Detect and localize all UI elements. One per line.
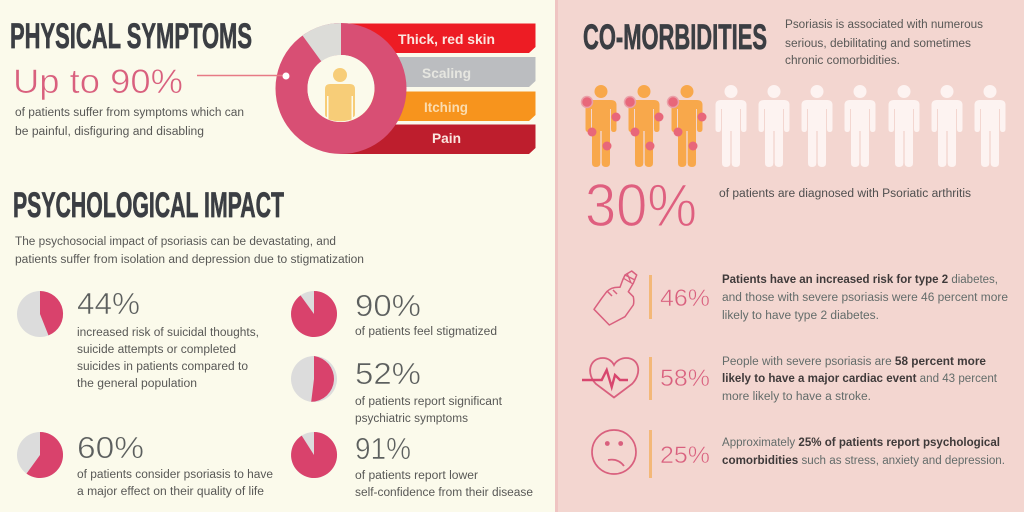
divider (649, 275, 652, 319)
stat: up to 90%: Up to 90% (13, 63, 183, 101)
icon: heart with pulse (582, 358, 638, 398)
text: psychosocial intro: The psychosocial impact of psoriasis can be devastating, and (15, 236, 336, 248)
pie: 44% (17, 291, 63, 337)
stat: 60%: a major effect on their quality of life (77, 486, 264, 498)
stat: 60% (17, 430, 273, 498)
text: diabetes: Patients have an increased risk for type 2 diabetes, (722, 274, 998, 286)
text: psychosocial intro (15, 236, 364, 266)
icon: finger prick (594, 271, 637, 325)
divider (649, 430, 652, 478)
stat: 44%: increased risk of suicidal thoughts, (77, 327, 259, 339)
pie: 90% (291, 291, 337, 337)
banner: scaling: Scaling (422, 65, 471, 81)
text: psychological: Approximately 25% of patients report psychological (722, 437, 1000, 449)
text: diabetes: and those with severe psoriasis were 46 percent more (722, 292, 1008, 304)
text: cardiac: more likely to have a stroke. (722, 391, 871, 403)
banner: scaling (341, 57, 536, 87)
stat: 52%: 52% (355, 356, 421, 391)
stat: 91%: 91% (355, 431, 411, 466)
symptom banners (341, 24, 536, 154)
text: cardiac: likely to have a major cardiac event and 43 percent (722, 373, 998, 385)
text: psoriatic arthritis: of patients are diagnosed with Psoriatic arthritis (719, 188, 971, 200)
heading: psychological impact: PSYCHOLOGICAL IMPACT (13, 186, 284, 225)
stat: 44% (17, 286, 259, 390)
panel: background right (555, 0, 1024, 512)
stat: 90% (291, 288, 497, 338)
text: psychosocial intro: patients suffer from isolation and depression due to stigmatization (15, 254, 364, 266)
icon: person in donut (325, 68, 355, 121)
heading: physical symptoms: PHYSICAL SYMPTOMS (10, 17, 252, 56)
text: comorbidities intro (785, 19, 983, 67)
stat: 90%: of patients feel stigmatized (355, 326, 497, 338)
connector dot (282, 72, 290, 80)
stat: 91% (291, 431, 533, 499)
banner: pain: Pain (432, 130, 461, 146)
stat: 30%: 30% (585, 172, 697, 239)
text: comorbidities intro: chronic comorbidities. (785, 55, 900, 67)
stat: 91%: self-confidence from their disease (355, 487, 533, 499)
pie: 52% (291, 356, 337, 402)
stat: 44%: suicide attempts or completed (77, 344, 236, 356)
banner: thick red skin (341, 24, 536, 53)
banner: thick red skin: Thick, red skin (398, 31, 495, 47)
panel: background left (0, 0, 555, 512)
stat: 58%: 58% (660, 365, 710, 392)
row: cardiac (582, 356, 998, 403)
divider (649, 357, 652, 400)
pie: 60% (17, 432, 63, 478)
text: comorbidities intro: serious, debilitating and sometimes (785, 38, 971, 50)
stat: 52% (291, 356, 503, 425)
stat: 52%: psychiatric symptoms (355, 413, 468, 425)
heading: co-morbidities: CO-MORBIDITIES (583, 18, 767, 57)
text: cardiac: People with severe psoriasis are 58 percent more (722, 356, 986, 368)
stat: 60%: 60% (77, 430, 144, 465)
stat: 90%: 90% (355, 288, 421, 323)
stat: 60%: of patients consider psoriasis to have (77, 469, 273, 481)
text: cardiac (722, 356, 998, 403)
icon: sad face (592, 430, 636, 474)
stat: 44%: 44% (77, 286, 140, 321)
row: diabetes (594, 271, 1008, 325)
text: psychological: comorbidities such as stress, anxiety and depression. (722, 455, 1005, 467)
stat: 46%: 46% (660, 285, 710, 312)
text: diabetes (722, 274, 1008, 322)
chart: donut 90% (292, 23, 390, 138)
text: symptoms description: be painful, disfiguring and disabling (15, 126, 204, 138)
stat: 44%: suicides in patients compared to (77, 361, 248, 373)
stat: 25%: 25% (660, 442, 710, 469)
row: psychological (592, 430, 1005, 478)
text: comorbidities intro: Psoriasis is associated with numerous (785, 19, 983, 31)
text: diabetes: likely to have type 2 diabetes. (722, 310, 879, 322)
connector line (197, 74, 285, 76)
banner: pain (341, 124, 536, 154)
text: symptoms description (15, 107, 244, 138)
stat: 52%: of patients report significant (355, 396, 503, 408)
banner: itching (341, 92, 536, 121)
pictogram: 3 of 10 people affected (582, 85, 1006, 167)
stat: 44%: the general population (77, 378, 197, 390)
stat: 91%: of patients report lower (355, 470, 478, 482)
text: symptoms description: of patients suffer from symptoms which can (15, 107, 244, 119)
pie: 91% (291, 432, 337, 478)
banner: itching: Itching (424, 99, 468, 115)
text: psychological (722, 437, 1005, 467)
